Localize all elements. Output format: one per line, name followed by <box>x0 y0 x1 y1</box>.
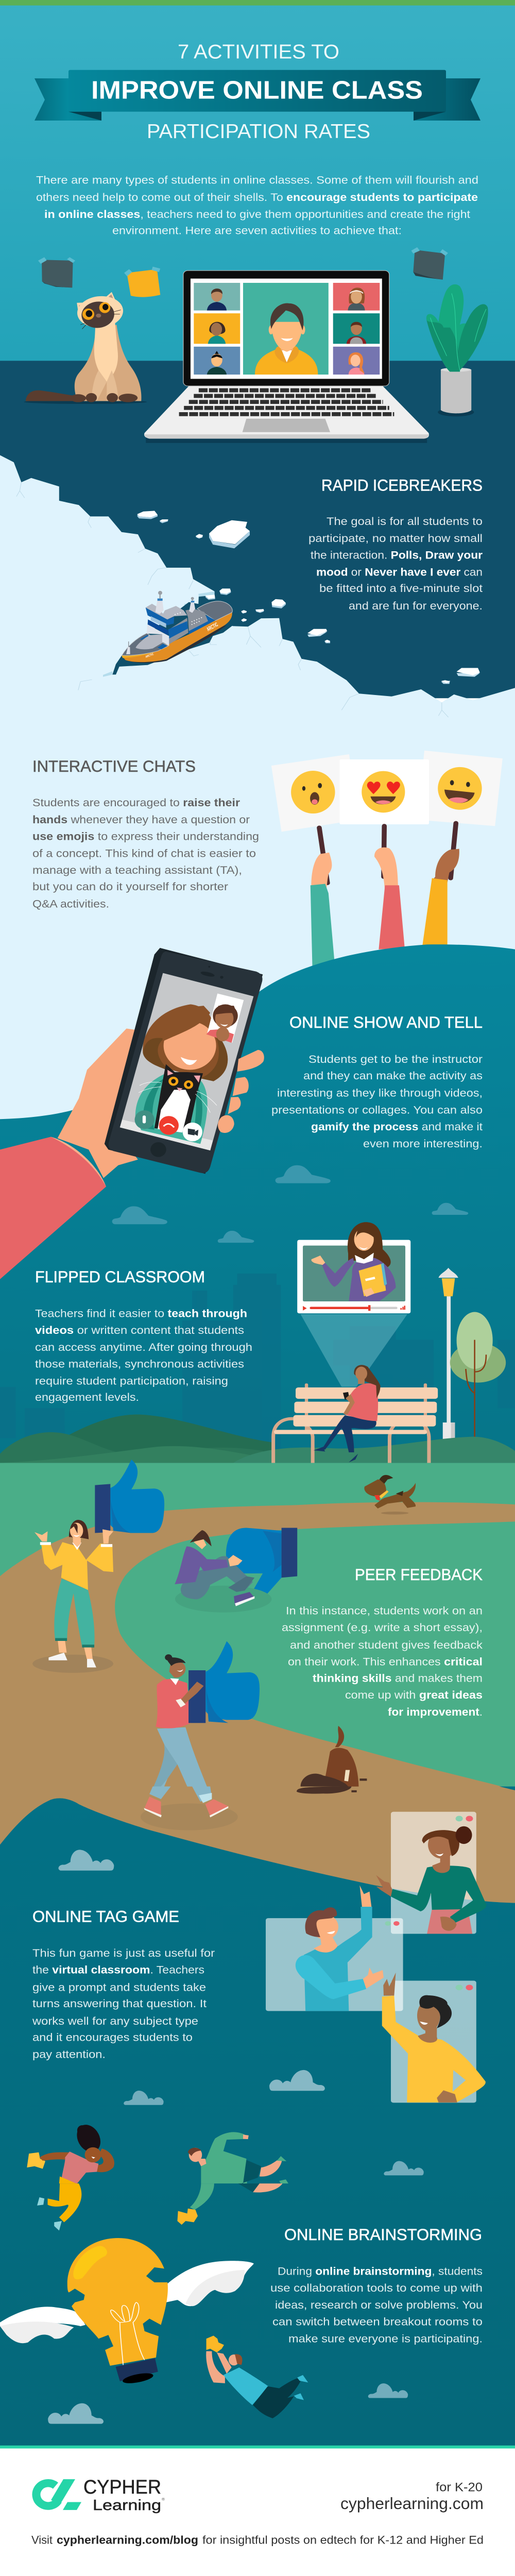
projector beam <box>301 1314 407 1387</box>
man in yellow waving <box>382 1973 486 2103</box>
body: can switch between breakout rooms to <box>272 2315 483 2328</box>
flying student with puzzle piece <box>27 2123 114 2183</box>
icebreaker ship: ARCTIC <box>145 653 154 659</box>
panel: interactive chats illustration <box>271 751 503 893</box>
panel: online tag game text <box>32 1907 215 2060</box>
brown path lower section <box>0 1787 515 1903</box>
teal hill background <box>0 944 515 1492</box>
logo wordmark: CYPHER <box>83 2477 161 2498</box>
flying student arm and puzzle piece <box>177 2183 283 2225</box>
panel: peer feedback text <box>282 1565 483 1718</box>
body <box>270 2265 483 2345</box>
body: ideas, research or solve problems. You <box>275 2298 483 2311</box>
heading: FLIPPED CLASSROOM <box>35 1267 205 1286</box>
street lamp <box>438 1268 458 1462</box>
tree <box>450 1312 506 1438</box>
website: cypherlearning.com <box>340 2495 484 2513</box>
sign: heart eyes emoji <box>339 759 429 824</box>
body: mood or Never have I ever can <box>316 566 483 578</box>
panel: online show and tell illustration <box>0 948 264 1279</box>
left wing <box>0 2307 85 2343</box>
blog callout <box>31 2534 484 2546</box>
body: even more interesting. <box>363 1137 483 1150</box>
panel: online tag game illustration <box>27 1812 486 2183</box>
logo wordmark <box>83 2477 165 2514</box>
body: Q&A activities. <box>32 897 109 910</box>
bench and reader <box>273 1365 438 1463</box>
laptop screen bezel <box>183 270 389 386</box>
thumbs down <box>226 1528 297 1602</box>
dirt mound <box>297 1787 357 1794</box>
ice sheet <box>0 455 515 1444</box>
sticky note dark right <box>411 247 448 280</box>
sticky note yellow <box>124 266 160 297</box>
body: Students are encouraged to raise their <box>32 796 241 809</box>
body: gamify the process and make it <box>311 1121 483 1133</box>
call control buttons <box>134 1110 202 1141</box>
shadow under walker <box>141 1803 238 1831</box>
flying student in green <box>188 2132 288 2183</box>
video screen <box>297 1240 410 1313</box>
body: the virtual classroom . Teachers <box>32 1963 204 1976</box>
city skyline <box>0 1274 515 1463</box>
body: interesting as they like through videos, <box>277 1087 483 1099</box>
panel: rapid icebreakers text <box>308 476 483 612</box>
teacher figure <box>312 1222 396 1301</box>
laptop deck <box>144 386 429 438</box>
body: require student participation, raising <box>35 1375 228 1387</box>
ice floes <box>138 511 286 622</box>
body <box>32 1946 215 2060</box>
clouds in show and tell zone <box>112 1165 468 1243</box>
right wing <box>166 2261 254 2306</box>
panel: header background <box>0 0 515 377</box>
walking woman <box>153 1641 260 1787</box>
arms holding signs <box>311 878 448 1022</box>
body: give a prompt and students take <box>32 1981 206 1993</box>
digging dog <box>301 1726 367 1787</box>
dirt mound and walking feet <box>141 1787 357 1831</box>
video window middle <box>266 1918 403 2011</box>
heading: PEER FEEDBACK <box>355 1565 483 1584</box>
far floes near icebreakers <box>307 629 480 684</box>
phone speaker and camera <box>200 966 224 979</box>
body: hands whenever they have a question or <box>32 813 250 826</box>
intro paragraph: in online classes , teachers need to give them opportunities and create the right <box>44 208 470 221</box>
blog callout: cypherlearning.com/blog <box>57 2534 198 2546</box>
logo wordmark: Learning <box>93 2497 161 2514</box>
body: engagement levels. <box>35 1391 139 1403</box>
heading: INTERACTIVE CHATS <box>32 757 196 775</box>
video tiles <box>194 283 380 375</box>
body: on their work. This enhances critical <box>288 1655 483 1668</box>
icebreaker ship <box>122 591 232 663</box>
body: Teachers find it easier to teach through <box>35 1307 247 1319</box>
panel: flipped classroom text <box>35 1267 252 1403</box>
body: The goal is for all students to <box>327 515 483 528</box>
body <box>32 796 259 910</box>
blog callout: Visit <box>31 2534 53 2546</box>
body: the interaction. Polls, Draw your <box>311 549 483 561</box>
panel: online brainstorming illustration <box>0 2183 408 2424</box>
participant: woman orange hair <box>349 352 365 375</box>
thumbs up one <box>95 1460 164 1533</box>
heading: ONLINE BRAINSTORMING <box>284 2225 482 2244</box>
heading: RAPID ICEBREAKERS <box>321 476 483 494</box>
body: During online brainstorming , students <box>278 2265 483 2277</box>
body: and another student gives feedback <box>290 1638 483 1651</box>
panel: header text <box>35 41 480 237</box>
audience label: for K-20 <box>436 2481 483 2494</box>
puzzle lightbulb <box>67 2238 168 2385</box>
body: videos or written content that students <box>35 1324 244 1336</box>
heading: ONLINE SHOW AND TELL <box>289 1013 483 1031</box>
intro paragraph <box>36 174 478 237</box>
body: presentations or collages. You can also <box>271 1104 483 1116</box>
body: and are fun for everyone. <box>349 599 483 612</box>
woman reading on bench <box>314 1365 381 1462</box>
clouds in brainstorm zone <box>48 2383 408 2424</box>
hands holding signs <box>311 848 459 893</box>
bench <box>273 1383 438 1463</box>
body: come up with great ideas <box>345 1688 483 1701</box>
green park ground <box>0 1463 515 1840</box>
woman in yellow sweater <box>32 1520 113 1673</box>
hand palm holding phone <box>58 1028 138 1178</box>
body: make sure everyone is participating. <box>288 2332 483 2345</box>
body: assignment (e.g. write a short essay), <box>282 1621 483 1634</box>
bulb base <box>116 2358 158 2381</box>
participant: woman teal <box>208 322 226 344</box>
title line one: 7 ACTIVITIES TO <box>178 41 339 63</box>
cat in video call <box>139 1064 217 1132</box>
video call woman <box>135 1004 228 1144</box>
home button <box>150 1142 166 1157</box>
participant: man with bun <box>207 351 227 375</box>
panel: footer <box>0 2446 515 2576</box>
title main line: IMPROVE ONLINE CLASS <box>91 76 423 104</box>
heading: ONLINE TAG GAME <box>32 1907 179 1925</box>
body: but you can do it yourself for shorter <box>32 880 228 893</box>
body: of a concept. This kind of chat is easier to <box>32 847 256 859</box>
logo mark <box>36 2479 81 2510</box>
body: thinking skills and makes them <box>313 1672 483 1684</box>
potted plant <box>426 284 488 416</box>
intro paragraph: There are many types of students in online classes. Some of them will flourish and <box>36 174 478 186</box>
body: pay attention. <box>32 2048 106 2060</box>
siamese cat <box>24 292 147 404</box>
ship name: ARCTIC <box>205 622 219 633</box>
body: can access anytime. After going through <box>35 1341 252 1353</box>
panel: flipped classroom illustration <box>297 1222 506 1462</box>
body: and they can make the activity as <box>303 1069 483 1082</box>
video window bottom <box>391 1980 476 2103</box>
participant: woman with headband <box>348 287 365 311</box>
panel: hero illustration <box>24 247 488 443</box>
body: turns answering that question. It <box>32 1997 207 2010</box>
panel: online show and tell text <box>271 1013 483 1150</box>
sign sticks <box>319 823 456 883</box>
body <box>35 1307 252 1403</box>
intro paragraph: environment. Here are seven activities to achieve that: <box>112 224 402 237</box>
body: In this instance, students work on an <box>286 1604 483 1617</box>
park hills <box>0 1415 515 1463</box>
sleeve <box>0 1137 106 1279</box>
ice cracks <box>16 482 449 717</box>
ice wedge shadows <box>103 591 215 677</box>
laptop <box>144 270 429 443</box>
logo wordmark: ® <box>162 2497 165 2502</box>
intro paragraph: others need help to come out of their shells. To encourage students to participate <box>36 191 478 204</box>
water channel around ship <box>112 602 233 674</box>
phone screen <box>120 973 253 1150</box>
panel: rapid icebreakers illustration <box>103 511 286 677</box>
host participant <box>255 303 318 375</box>
body: be fitted into a five-minute slot <box>319 582 483 595</box>
walker legs and sneakers <box>144 1787 228 1817</box>
body: works well for any subject type <box>32 2014 198 2027</box>
body: for improvement. <box>388 1705 483 1718</box>
body: use emojis to express their understanding <box>32 830 259 843</box>
body: use collaboration tools to come up with <box>270 2281 483 2294</box>
brown walking path <box>0 1502 515 1790</box>
body <box>271 1053 483 1150</box>
panel: interactive chats text <box>32 757 259 910</box>
title line three: PARTICIPATION RATES <box>147 120 370 143</box>
bulb filament <box>111 2302 145 2365</box>
body: participate, no matter how small <box>308 532 483 545</box>
clouds in tag game zone <box>58 1850 424 2175</box>
dog running <box>364 1475 416 1515</box>
body: those materials, synchronous activities <box>35 1358 244 1370</box>
sticky note dark left <box>38 257 75 287</box>
body: This fun game is just as useful for <box>32 1946 215 1959</box>
sign: surprised emoji <box>271 754 358 832</box>
seated woman <box>175 1530 271 1613</box>
trackpad <box>243 419 330 432</box>
man in blue waving <box>296 1885 384 2011</box>
caller thumbnail <box>207 993 244 1043</box>
body: and it encourages students to <box>32 2031 193 2044</box>
panel: online brainstorming text <box>270 2225 483 2345</box>
lower teal background <box>0 1787 515 2446</box>
desk and dark water background <box>0 361 515 698</box>
falling student with puzzle piece <box>206 2336 308 2418</box>
phone body <box>105 948 263 1174</box>
body <box>282 1604 483 1718</box>
top accent bar <box>0 0 515 6</box>
footer accent bar <box>0 2446 515 2448</box>
flying student legs yellow <box>37 2183 81 2230</box>
panel: peer feedback illustration <box>32 1460 416 1787</box>
participant: man grey <box>347 322 366 344</box>
fingers <box>218 1050 264 1133</box>
blog callout: for insightful posts on edtech for K-12 and Higher Ed <box>202 2534 484 2546</box>
keyboard <box>179 390 394 414</box>
video window top <box>391 1812 476 1934</box>
body: Students get to be the instructor <box>308 1053 483 1065</box>
participant: man navy <box>207 289 227 311</box>
body <box>308 515 483 612</box>
sign: third emoji laughing <box>417 751 503 826</box>
woman in green waving <box>376 1826 486 1934</box>
body: manage with a teaching assistant (TA), <box>32 864 242 876</box>
ribbon <box>35 70 480 121</box>
